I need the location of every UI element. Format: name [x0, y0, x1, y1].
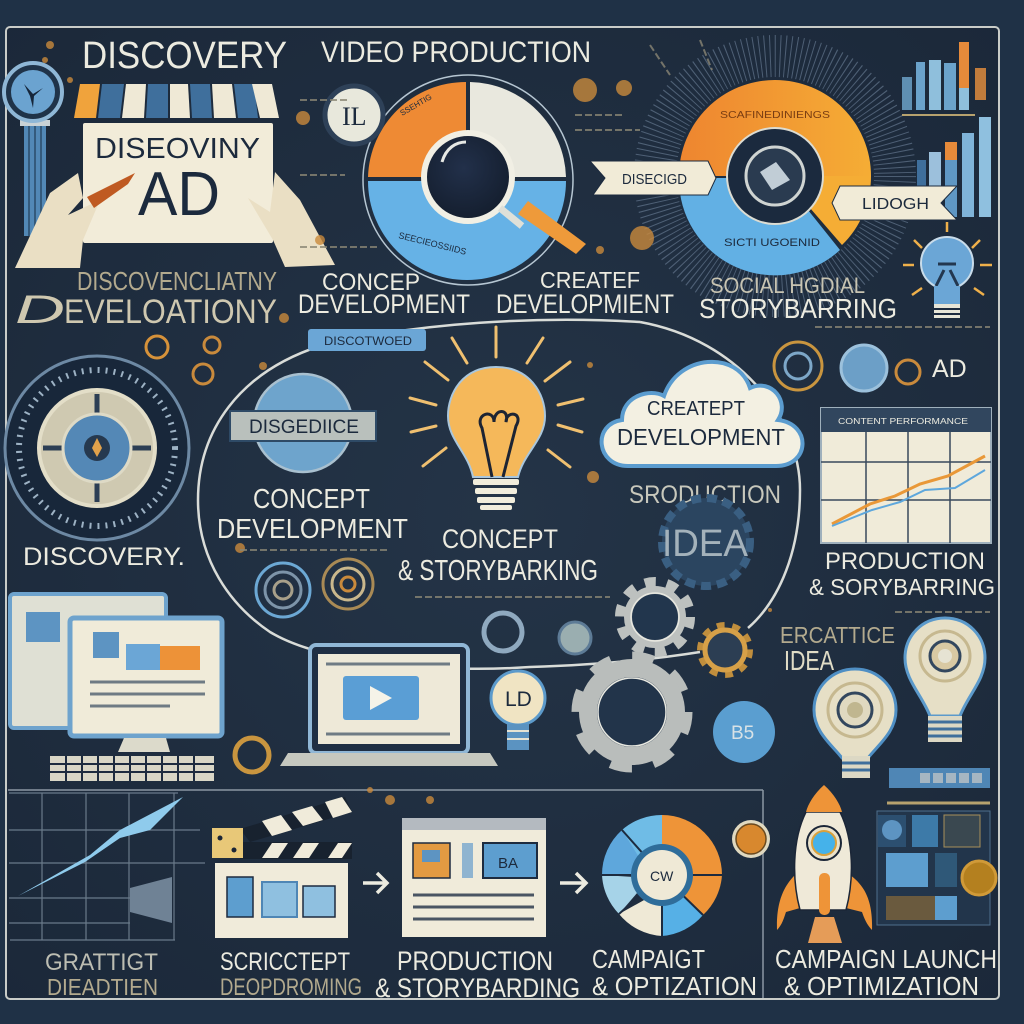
- icon: small light bulb top right: [903, 222, 992, 318]
- illustration: storefront ad sign: DISEOVINY: [95, 133, 260, 165]
- label: production storyboarding right: [809, 548, 995, 600]
- heading: video production: VIDEO PRODUCTION: [321, 36, 591, 69]
- label: concept storyboarding center: [398, 524, 598, 587]
- icon: gears: [578, 584, 749, 766]
- arrow: storyboard to donut: [560, 873, 586, 893]
- label: concept top: CONCEP: [322, 269, 420, 296]
- heading: development script: [15, 266, 277, 332]
- chart: donut with magnifier: SSEHTIG: [398, 92, 433, 118]
- label: campaign optimization: & OPTIZATION: [592, 971, 757, 1001]
- decorative specks: [42, 41, 772, 805]
- chart: sunburst ring: SICTI UGOENID: [724, 237, 820, 249]
- arrow: clapper to storyboard: [363, 873, 387, 893]
- label: concept storyboarding center: CONCEPT: [442, 524, 558, 554]
- illustration: compass dial: [5, 356, 189, 540]
- label: creative idea: IDEA: [784, 645, 834, 676]
- label: campaign launch: & OPTIMIZATION: [784, 971, 979, 1001]
- icon: top left gauge: [4, 63, 62, 236]
- label: creative idea: ERCATTICE: [780, 622, 895, 648]
- tag: top arc: DISCOTWOED: [324, 334, 412, 348]
- label: campaign launch: [775, 944, 997, 1001]
- heading: development script: D: [15, 288, 65, 332]
- illustration: storefront ad sign: AD: [138, 160, 220, 229]
- icon: blue disc with banner: [230, 374, 376, 472]
- heading: development script: DISCOVENCLIATNY: [77, 266, 277, 296]
- label: campaign optimization: CAMPAIGT: [592, 944, 705, 974]
- illustration: storefront ad sign: [15, 84, 335, 268]
- illustration: clapperboard: [212, 797, 352, 938]
- icons: small round ornaments: [235, 559, 591, 772]
- tag: top arc: [308, 329, 426, 351]
- label: script development: [220, 948, 362, 1001]
- chart: growth line: [9, 793, 205, 940]
- label: social media: SOCIAL HGDIAL: [710, 273, 865, 298]
- decorative dashes: [240, 40, 990, 612]
- panel: central arc: [198, 320, 800, 669]
- illustration: storyboard sheet: [402, 818, 546, 937]
- illustration: twin computer monitors: [10, 594, 222, 781]
- chart: donut with magnifier: SEECIEOSSIIDS: [398, 230, 467, 257]
- chart: line chart panel: [821, 408, 991, 543]
- heading: discovery: DISCOVERY: [82, 35, 287, 77]
- chart: sunburst ring: [655, 56, 895, 296]
- icon: idea gear: IDEA: [662, 523, 749, 565]
- label: campaign optimization: [592, 944, 757, 1001]
- label: script development: DEOPDROMING: [220, 974, 362, 1001]
- icon: small coin: [732, 820, 770, 858]
- ribbon: right: LIDOGH: [862, 196, 929, 213]
- icon cluster: lower right tiles: [877, 803, 996, 925]
- label: sroduction: SRODUCTION: [629, 481, 781, 509]
- icon: right twin bulbs: [814, 618, 990, 788]
- chart: campaign donut: [602, 815, 722, 936]
- icon: small bulb: [491, 671, 545, 750]
- illustration: rocket: [777, 785, 872, 943]
- label: concept storyboarding center: & STORYBARKING: [398, 555, 598, 587]
- label: production storyboarding right: & SORYBARRING: [809, 574, 995, 600]
- icon cluster: small ornaments row: [113, 336, 920, 391]
- label: production storyboarding right: PRODUCTION: [825, 548, 985, 575]
- chart: line chart panel: CONTENT PERFORMANCE: [838, 417, 968, 426]
- label: campaign launch: CAMPAIGN LAUNCH: [775, 944, 997, 974]
- label: ad: AD: [932, 355, 967, 383]
- icon: central light bulb: [410, 327, 583, 510]
- label: concept development center: CONCEPT: [253, 483, 370, 514]
- label: storybarring: STORYBARRING: [699, 293, 897, 324]
- callout: cloud: DEVELOPMENT: [617, 424, 785, 450]
- label: discovery left: DISCOVERY.: [23, 543, 185, 571]
- illustration: storyboard sheet: BA: [498, 855, 518, 872]
- label: concept development center: DEVELOPMENT: [217, 513, 408, 544]
- label: bottom left caption: GRATTIGT: [45, 949, 158, 976]
- chart: top right bars: [902, 42, 991, 217]
- label: script development: SCRICCTEPT: [220, 948, 350, 976]
- label: development top: DEVELOPMENT: [298, 289, 470, 319]
- icon: idea gear: [662, 498, 750, 586]
- callout: cloud: [602, 362, 803, 466]
- label: creative idea: [780, 622, 895, 676]
- icon: round badge: [713, 701, 775, 763]
- ribbon: right: [832, 186, 957, 220]
- chart: campaign donut: CW: [650, 868, 674, 884]
- label: production storyboarding bottom: PRODUCTION: [397, 946, 553, 976]
- label: bottom left caption: DIEADTIEN: [47, 974, 158, 1000]
- ribbon: left: [590, 161, 716, 195]
- callout: cloud: CREATEPT: [647, 398, 745, 420]
- chart: sunburst ring: SCAFINEDINIENGS: [720, 110, 830, 121]
- label: concept development center: [217, 483, 408, 544]
- icon: blue disc with banner: DISGEDIICE: [249, 417, 359, 438]
- label: production storyboarding bottom: & STORYBARDING: [375, 973, 580, 1003]
- chart: donut with magnifier: IL: [342, 102, 367, 131]
- icon: round badge: B5: [731, 723, 754, 744]
- label: createf: CREATEF: [540, 267, 640, 293]
- label: bottom left caption: [45, 949, 158, 1000]
- ribbon: left: DISECIGD: [622, 171, 687, 188]
- label: development right: DEVELOPMIENT: [496, 289, 674, 319]
- icon: small bulb: LD: [505, 688, 532, 711]
- heading: development script: EVELOATIONY: [64, 293, 277, 331]
- label: production storyboarding bottom: [375, 946, 580, 1003]
- illustration: laptop video player: [280, 645, 498, 766]
- chart: donut with magnifier: [325, 75, 586, 285]
